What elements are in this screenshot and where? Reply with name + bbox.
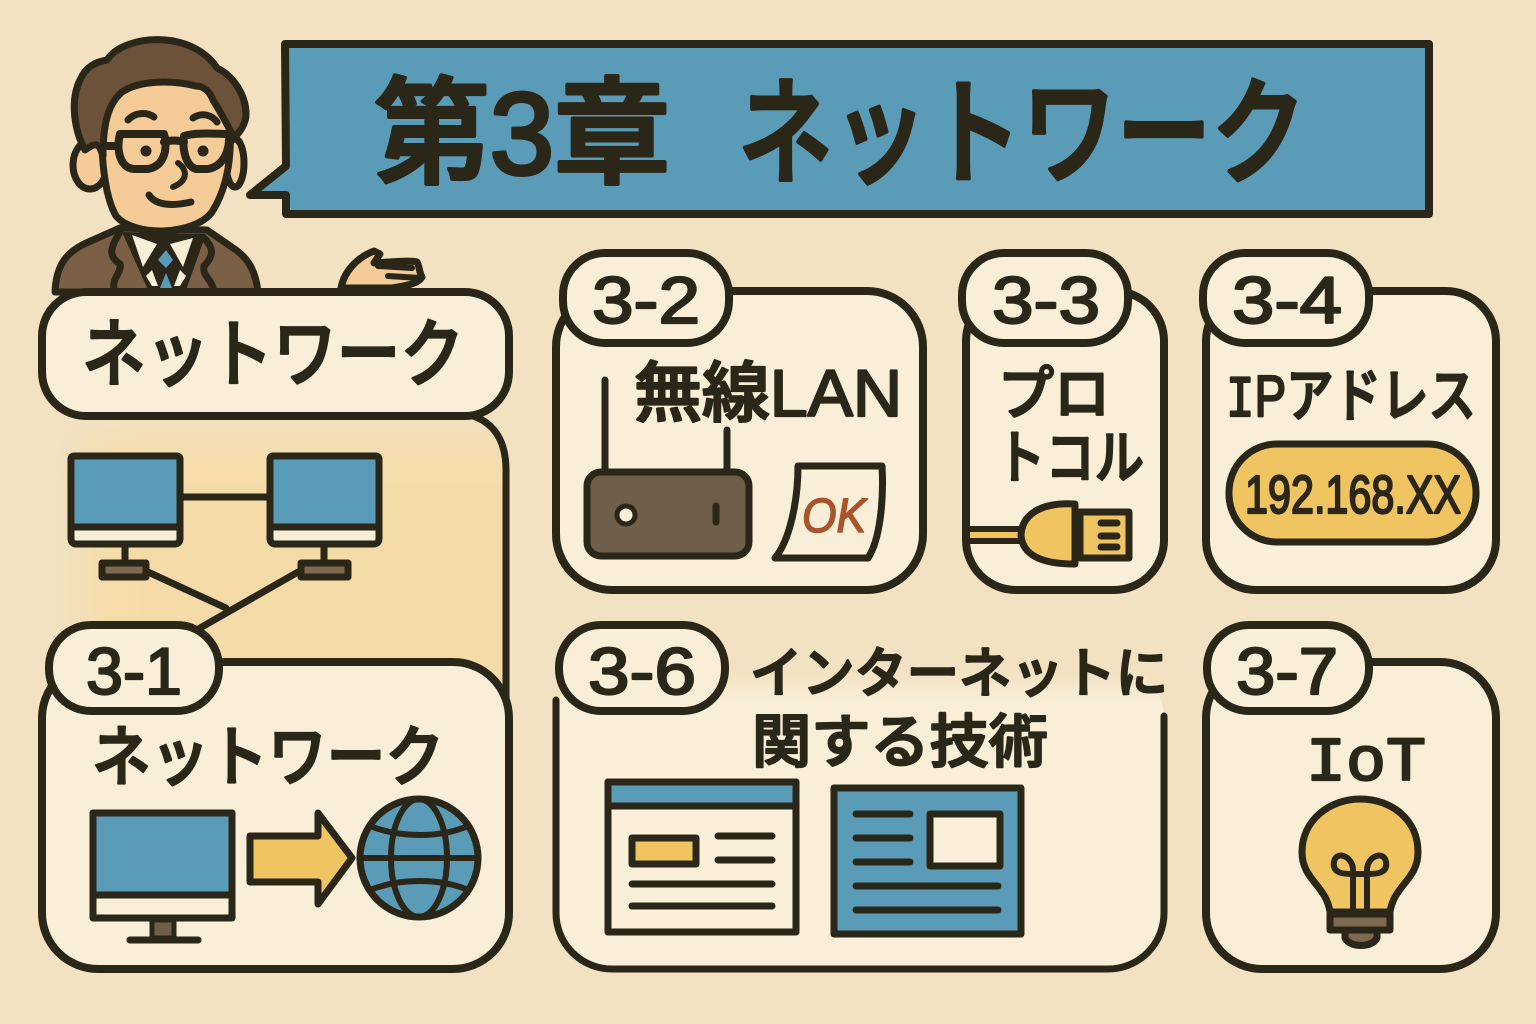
eyebrows (128, 114, 217, 122)
badge 3-6 (559, 625, 725, 711)
glasses (104, 134, 229, 169)
label: 無線LAN (634, 356, 902, 430)
badge 3-4: 3-4 (1232, 263, 1342, 337)
label (750, 644, 1168, 775)
label: プロ (998, 362, 1110, 427)
badge 3-3: 3-3 (992, 263, 1100, 337)
mouth (149, 195, 191, 204)
icon: article page (834, 788, 1021, 934)
badge 3-7 (1207, 625, 1369, 711)
hand (341, 251, 422, 288)
icon: OK note (775, 466, 882, 558)
icon: router (587, 380, 749, 556)
badge 3-4 (1203, 253, 1369, 343)
label: インターネットに (750, 644, 1168, 704)
icon: light bulb (1302, 799, 1418, 946)
icon: computer (93, 813, 232, 940)
panel: 3-2 wireless LAN (556, 253, 923, 590)
panel: 3-1 network (42, 625, 509, 969)
badge 3-2 (563, 253, 729, 343)
title text: 第3章 (374, 69, 670, 199)
icon: web page (608, 782, 796, 932)
left ear (73, 141, 107, 189)
icon: globe (360, 799, 478, 917)
panel: 3-3 protocol (962, 253, 1164, 590)
icon: plug (970, 504, 1129, 564)
label: 関する技術 (752, 710, 1048, 775)
panel outline (556, 700, 1164, 969)
panel: 3-7 IoT (1206, 625, 1496, 969)
label: トコル (996, 426, 1144, 491)
label (996, 362, 1144, 491)
face (102, 76, 230, 231)
badge 3-7: 3-7 (1236, 634, 1338, 708)
hair (74, 40, 246, 156)
lapels (112, 232, 213, 288)
panel: 3-6 internet technology (556, 620, 1220, 969)
panel: network overview (38, 288, 513, 698)
label: IPアドレス (1226, 364, 1476, 434)
shirt and tie (122, 232, 206, 290)
badge 3-2: 3-2 (592, 263, 700, 337)
badge 3-1 (49, 625, 219, 711)
badge 3-3 (962, 253, 1128, 343)
IP pill (1229, 444, 1476, 542)
title text (374, 69, 1306, 199)
icon: OK note: OK (802, 490, 868, 543)
overview heading (42, 292, 509, 416)
presenter character (55, 40, 422, 292)
overview body (76, 430, 502, 684)
suit (55, 228, 258, 292)
label: ネットワーク (92, 720, 444, 794)
eyes (140, 146, 152, 156)
IP pill: 192.168.XX (1245, 465, 1461, 525)
arrow (250, 813, 352, 904)
icon: connected computers (71, 456, 379, 628)
nose (173, 163, 185, 187)
right ear (226, 139, 244, 187)
title banner (250, 44, 1429, 214)
overview heading: ネットワーク (82, 313, 464, 396)
badge 3-1: 3-1 (86, 634, 182, 708)
panel: 3-4 IP address (1203, 253, 1496, 590)
badge 3-6: 3-6 (588, 634, 696, 708)
title text: ネットワーク (738, 69, 1306, 199)
label: IoT (1306, 728, 1426, 799)
fade behind heading (700, 620, 1220, 686)
